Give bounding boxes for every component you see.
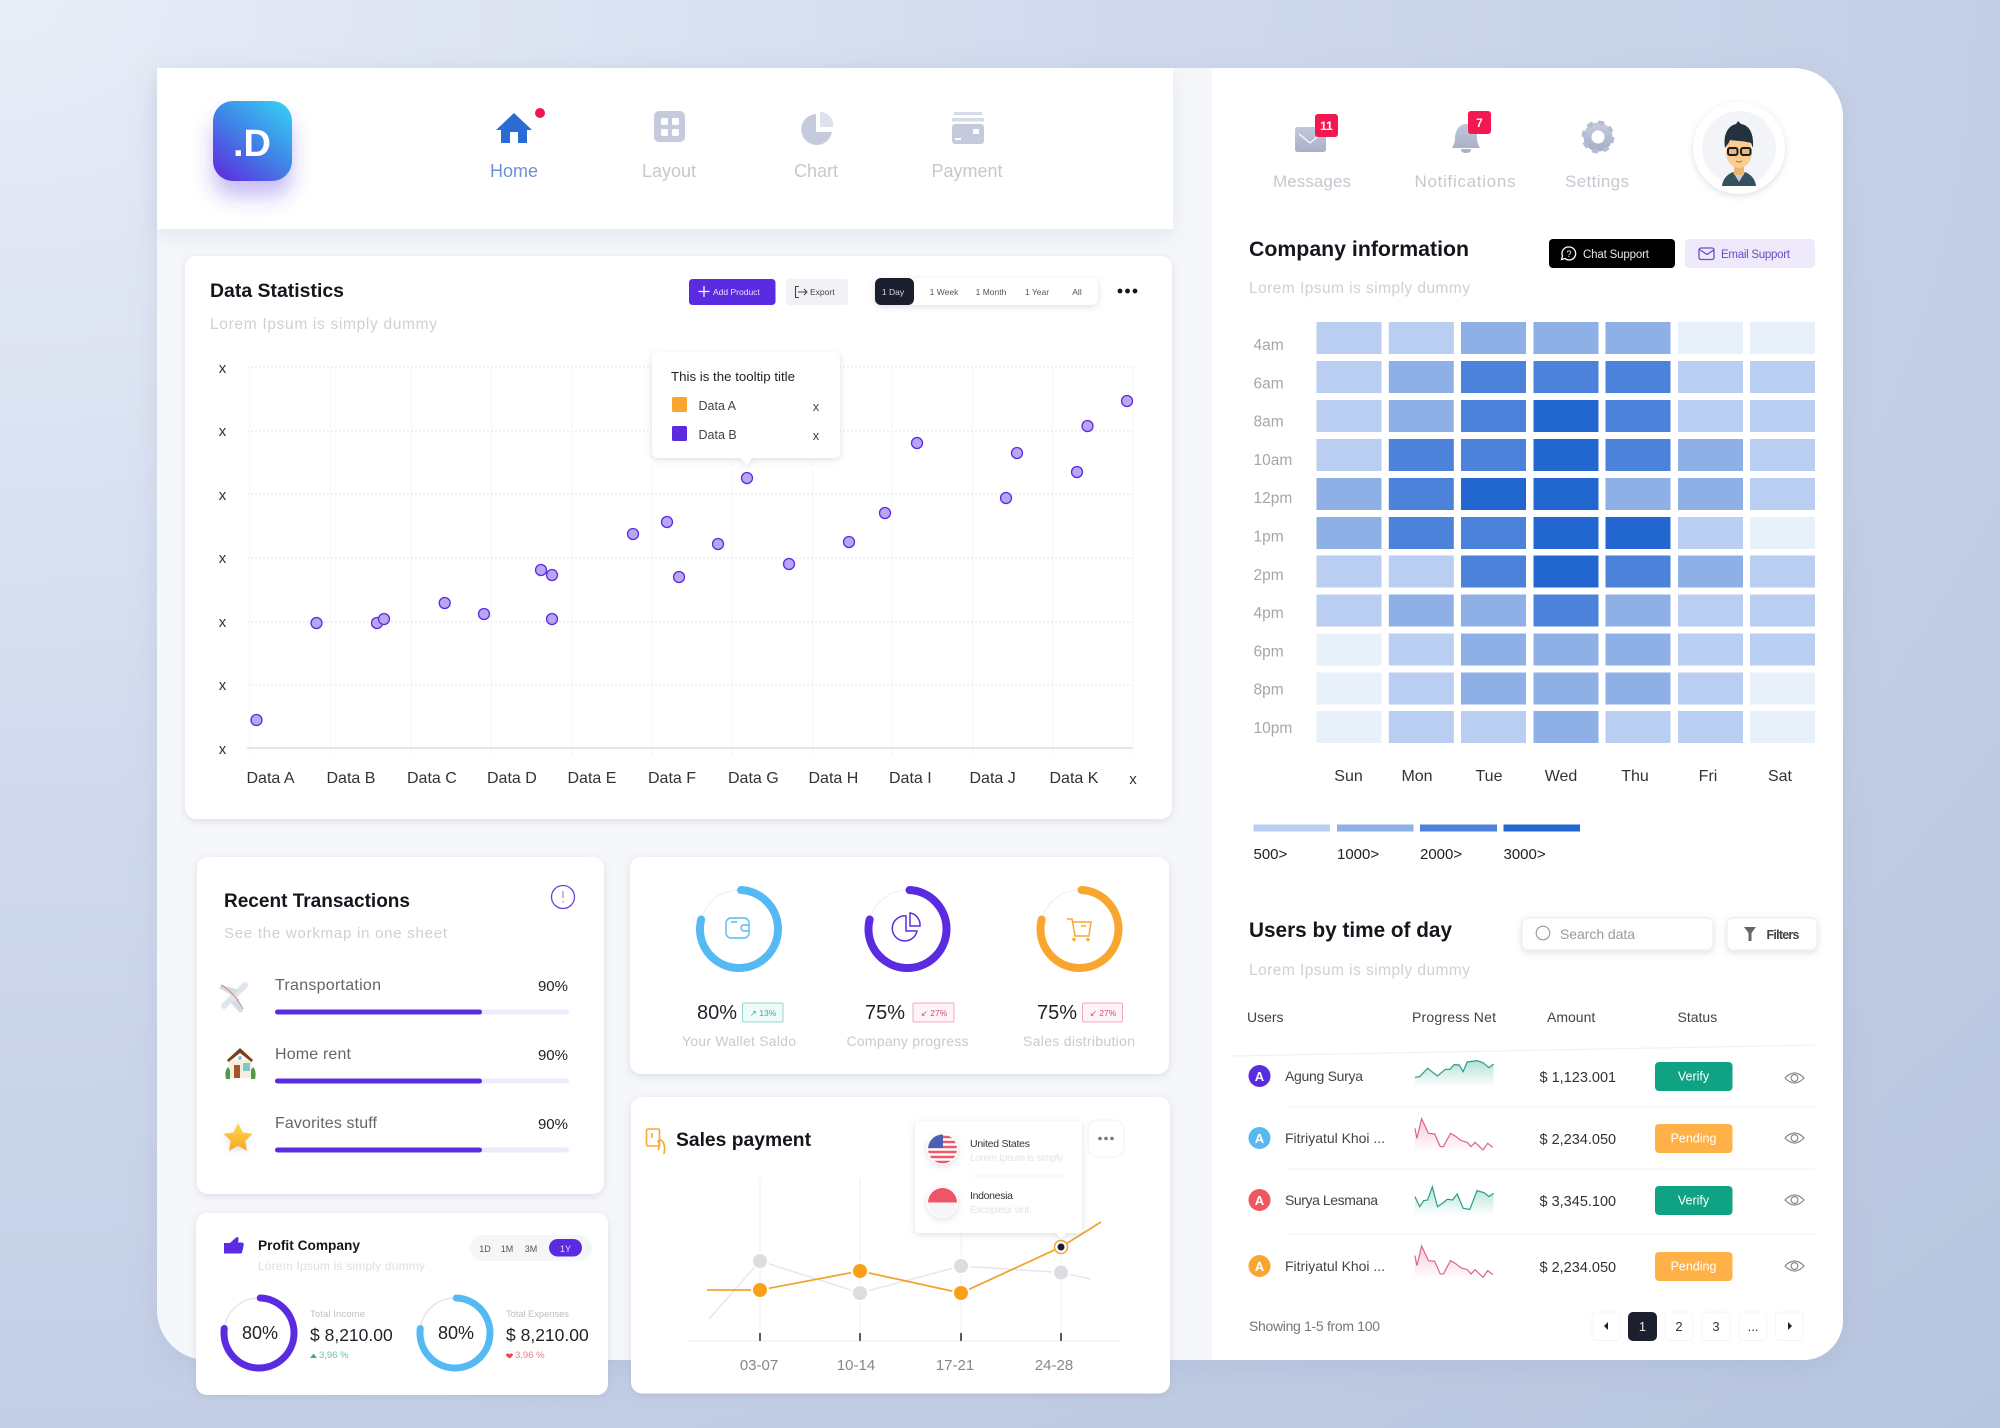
subtitle: Lorem Ipsum is simply dummy [210,316,437,333]
status [1655,1124,1732,1153]
metric: wallet saldo [682,888,796,1049]
pagination summary: Showing 1-5 from 100 [1249,1318,1380,1334]
row: favorites stuff [224,1115,569,1152]
table row 2 [1248,1119,1804,1153]
heading: Recent Transactions [224,891,410,912]
chat support button [1549,239,1675,268]
subtitle: Lorem Ipsum is simply dummy [258,1259,425,1273]
icon: star [224,1123,252,1151]
y axis labels [219,360,227,758]
icon: airplane [219,985,245,1013]
series: gray [709,1253,1091,1319]
row labels: 8am [1254,414,1284,431]
table row 1: $ 1,123.001 [1540,1070,1616,1086]
tooltip: This is the tooltip title [671,369,795,384]
search box [1522,918,1713,950]
more menu dots [1118,289,1137,293]
flag: Indonesia [927,1187,958,1218]
metric: company progress: 75% [865,1002,905,1024]
subtitle: Lorem Ipsum is simply dummy [1249,280,1470,297]
table row 4: Fitriyatul Khoi ... [1285,1258,1385,1274]
x axis labels: Data J [970,770,1016,787]
tooltip: x [813,428,820,443]
pagination [1592,1312,1804,1341]
heading: Company information [1249,237,1469,261]
range tabs: 3M [525,1244,537,1254]
flag: United States [927,1134,958,1164]
row labels: 4am [1254,337,1284,354]
main dashboard panel [157,68,1843,1360]
row labels: 6pm [1254,643,1284,660]
chat support button: ? [1566,249,1572,259]
avatar [1693,102,1785,194]
date labels: 03-07 [740,1357,778,1374]
row labels: 10pm [1254,720,1292,737]
total expenses: Total Expenses [506,1309,569,1320]
day labels: Fri [1699,768,1717,785]
row labels: 10am [1254,452,1292,469]
tooltip: Data A [698,399,737,413]
country popup: United States [970,1138,1030,1150]
total income [310,1309,393,1361]
date labels: 24-28 [1035,1357,1073,1374]
row: transportation [219,977,569,1014]
top navigation bar [157,68,1173,229]
day labels: Wed [1545,768,1577,785]
panel: profit company [196,1213,608,1395]
heading: Data Statistics: Data Statistics [210,280,344,302]
metric: sales distribution: 75% [1037,1002,1077,1024]
time range tabs [875,278,1098,305]
y axis labels: x [219,741,227,758]
x axis labels: Data C [407,770,457,787]
status [1655,1186,1732,1215]
table row 2: A [1255,1131,1265,1146]
x axis labels: Data K [1050,770,1099,787]
x axis labels: Data B [326,770,375,787]
heading: Profit Company [258,1238,360,1253]
country popup: Indonesia [970,1190,1013,1202]
data points [251,396,1132,726]
notifications [1414,111,1516,191]
total income: 3,96 % [319,1350,349,1361]
row labels: 6am [1254,375,1284,392]
heatmap cells [1316,322,1815,743]
sparkline [1415,1187,1494,1216]
series: orange [707,1222,1101,1301]
trend badge: ↗ 13% [750,1008,777,1018]
row: transportation: Transportation [275,977,381,994]
time range tabs: 1 Year [1025,287,1049,297]
row labels: 1pm [1254,528,1284,546]
row labels: 2pm [1254,567,1284,584]
metric: company progress: Company progress [846,1033,968,1049]
table row 3 [1248,1186,1804,1216]
right column background [1212,68,1843,1360]
date labels: 10-14 [837,1357,875,1374]
metric: wallet saldo: 80% [697,1002,737,1024]
icon: wallet [726,918,749,938]
pagination: ... [1748,1319,1758,1334]
date labels: 17-21 [936,1357,974,1374]
table row 1: Agung Surya [1285,1068,1363,1084]
y axis labels: x [219,423,227,440]
heatmap legend: 3000> [1504,846,1546,863]
heatmap legend: 1000> [1337,846,1379,863]
y axis labels: x [219,360,227,377]
eye icon [1785,1133,1804,1143]
x axis labels: Data D [487,770,537,787]
table row 2: $ 2,234.050 [1540,1132,1616,1148]
eye icon [1785,1073,1804,1083]
table header [1232,1009,1815,1056]
table row 4: $ 2,234.050 [1540,1260,1616,1276]
table row 1 [1248,1061,1804,1091]
y axis labels: x [219,550,227,567]
settings [1565,122,1629,191]
metric: sales distribution: Sales distribution [1023,1033,1135,1049]
email support button [1685,239,1815,268]
eye icon [1785,1195,1804,1205]
nav item: Home [490,108,545,181]
range tabs [470,1235,592,1261]
x axis labels: x [1129,771,1137,788]
row: transportation: 90% [538,978,568,995]
nav item: Layout [642,111,696,181]
icon: thumbs up [224,1237,244,1254]
top right toolbar [1273,102,1785,194]
metric: sales distribution [1023,888,1135,1049]
nav item: Payment: Payment [931,161,1003,181]
total expenses: 3,96 % [515,1350,545,1361]
sparkline [1415,1061,1494,1087]
y axis labels: x [219,487,227,504]
x axis labels: Data A [246,770,295,787]
day labels: Thu [1621,768,1649,785]
pagination: 3 [1712,1319,1720,1334]
status: Verify [1678,1070,1710,1084]
subtitle: See the workmap in one sheet [224,925,448,942]
row labels: 8pm [1254,682,1284,699]
time range tabs: All [1072,287,1082,297]
chat support button: Chat Support [1583,249,1650,261]
x axis labels: Data H [808,770,858,787]
pagination: 1 [1639,1319,1646,1334]
status: Pending [1671,1132,1716,1146]
x axis labels: Data G [728,770,779,787]
table header: Users [1247,1009,1284,1025]
messages [1273,114,1351,191]
messages: 11 [1320,119,1333,133]
metric: company progress [846,888,968,1049]
search box: Search data [1560,926,1635,942]
info icon [552,886,574,908]
table header: Amount [1547,1009,1595,1025]
row: home rent [225,1046,569,1084]
heading: Sales payment [676,1129,811,1151]
status: Pending [1671,1260,1716,1274]
x axis labels: Data F [648,770,696,787]
nav item: Chart: Chart [794,161,838,181]
heatmap legend [1254,824,1580,863]
range tabs: 1Y [560,1244,571,1254]
add product button [689,279,776,305]
heading: Users by time of day [1249,918,1452,942]
messages: Messages [1273,172,1351,191]
country popup: Excepteur sint [970,1205,1029,1216]
country popup: Lorem Ipsum is simply [970,1153,1063,1164]
time range tabs: 1 Day [882,287,905,297]
date labels [740,1357,1073,1374]
heatmap legend: 2000> [1420,846,1462,863]
panel: recent transactions [197,857,604,1194]
country popup [915,1121,1082,1239]
donut: expenses [419,1297,491,1369]
status [1655,1252,1732,1281]
more button [1088,1120,1124,1157]
x axis labels: Data I [889,770,932,787]
row labels: 4pm [1254,605,1284,622]
row labels: 12pm [1254,490,1292,507]
panel: data statistics [185,256,1172,819]
range tabs: 1D [479,1244,491,1254]
day labels: Mon [1401,768,1433,785]
day labels [1334,768,1793,785]
notifications: Notifications [1414,172,1516,191]
x axis labels: Data E [568,770,616,787]
nav item: Chart [794,112,838,181]
day labels: Tue [1476,768,1503,785]
y axis labels: x [219,677,227,694]
donut: expenses: 80% [438,1323,474,1343]
total expenses [506,1309,589,1361]
export button [786,279,848,305]
add product button: Add Product [713,287,760,297]
notifications: 7 [1476,116,1483,130]
nav item: Payment [931,112,1003,181]
metric: wallet saldo: Your Wallet Saldo [682,1033,796,1049]
row: home rent: 90% [538,1047,568,1064]
table row 2: Fitriyatul Khoi ... [1285,1130,1385,1146]
tooltip [652,352,840,466]
filters button: Filters [1766,928,1800,942]
total expenses: $ 8,210.00 [506,1325,589,1345]
filters button [1727,918,1817,950]
panel: sales payment [631,1097,1170,1394]
tooltip: x [813,399,820,414]
x axis labels [246,770,1137,788]
y axis labels: x [219,614,227,631]
export button: Export [810,287,835,297]
table row 3: Surya Lesmana [1285,1192,1378,1208]
trend badge [1082,1003,1122,1022]
icon: payment card [646,1129,665,1154]
trend badge [913,1003,954,1022]
subtitle: Lorem Ipsum is simply dummy [1249,962,1470,979]
heatmap [1254,322,1815,785]
nav item: Home: Home [490,161,538,181]
donut: income: 80% [242,1323,278,1343]
settings: Settings [1565,172,1629,191]
heatmap legend: 500> [1254,846,1288,863]
icon: pie [892,913,920,941]
logo [213,101,292,181]
donut: income [223,1297,295,1369]
table row 3: $ 3,345.100 [1540,1194,1616,1210]
logo: .D [233,123,271,165]
day labels: Sat [1768,768,1793,785]
trend badge [742,1003,783,1022]
nav item: Layout: Layout [642,161,696,181]
total income: Total Income [310,1309,365,1320]
time range tabs: 1 Week [930,287,959,297]
line chart [688,1178,1120,1374]
row: home rent: Home rent [275,1046,352,1063]
table header: Progress Net [1412,1009,1496,1025]
eye icon [1785,1261,1804,1271]
icon: cart [1067,919,1091,940]
time range tabs: 1 Month [976,287,1007,297]
table row 4: A [1255,1259,1265,1274]
scatter chart [219,352,1137,788]
table row 4 [1248,1246,1804,1281]
panel: company information [1249,237,1815,863]
row labels [1254,337,1292,737]
email support button: Email Support [1721,249,1791,261]
trend badge: ↙ 27% [921,1008,948,1018]
table row 1: A [1255,1069,1265,1084]
table header: Status [1678,1009,1717,1025]
range tabs: 1M [501,1244,513,1254]
trend badge: ↙ 27% [1090,1008,1117,1018]
total income: $ 8,210.00 [310,1325,393,1345]
icon: house [225,1048,256,1079]
status: Verify [1678,1194,1710,1208]
panel: users by time of day [1232,918,1817,1341]
panel: progress rings [630,857,1169,1074]
row: favorites stuff: Favorites stuff [275,1115,378,1132]
row: favorites stuff: 90% [538,1116,568,1133]
sparkline [1415,1246,1493,1279]
pagination: 2 [1675,1319,1683,1334]
table row 3: A [1255,1193,1265,1208]
day labels: Sun [1334,768,1363,785]
sparkline [1415,1119,1493,1152]
status [1655,1062,1732,1091]
tooltip: Data B [698,428,737,442]
